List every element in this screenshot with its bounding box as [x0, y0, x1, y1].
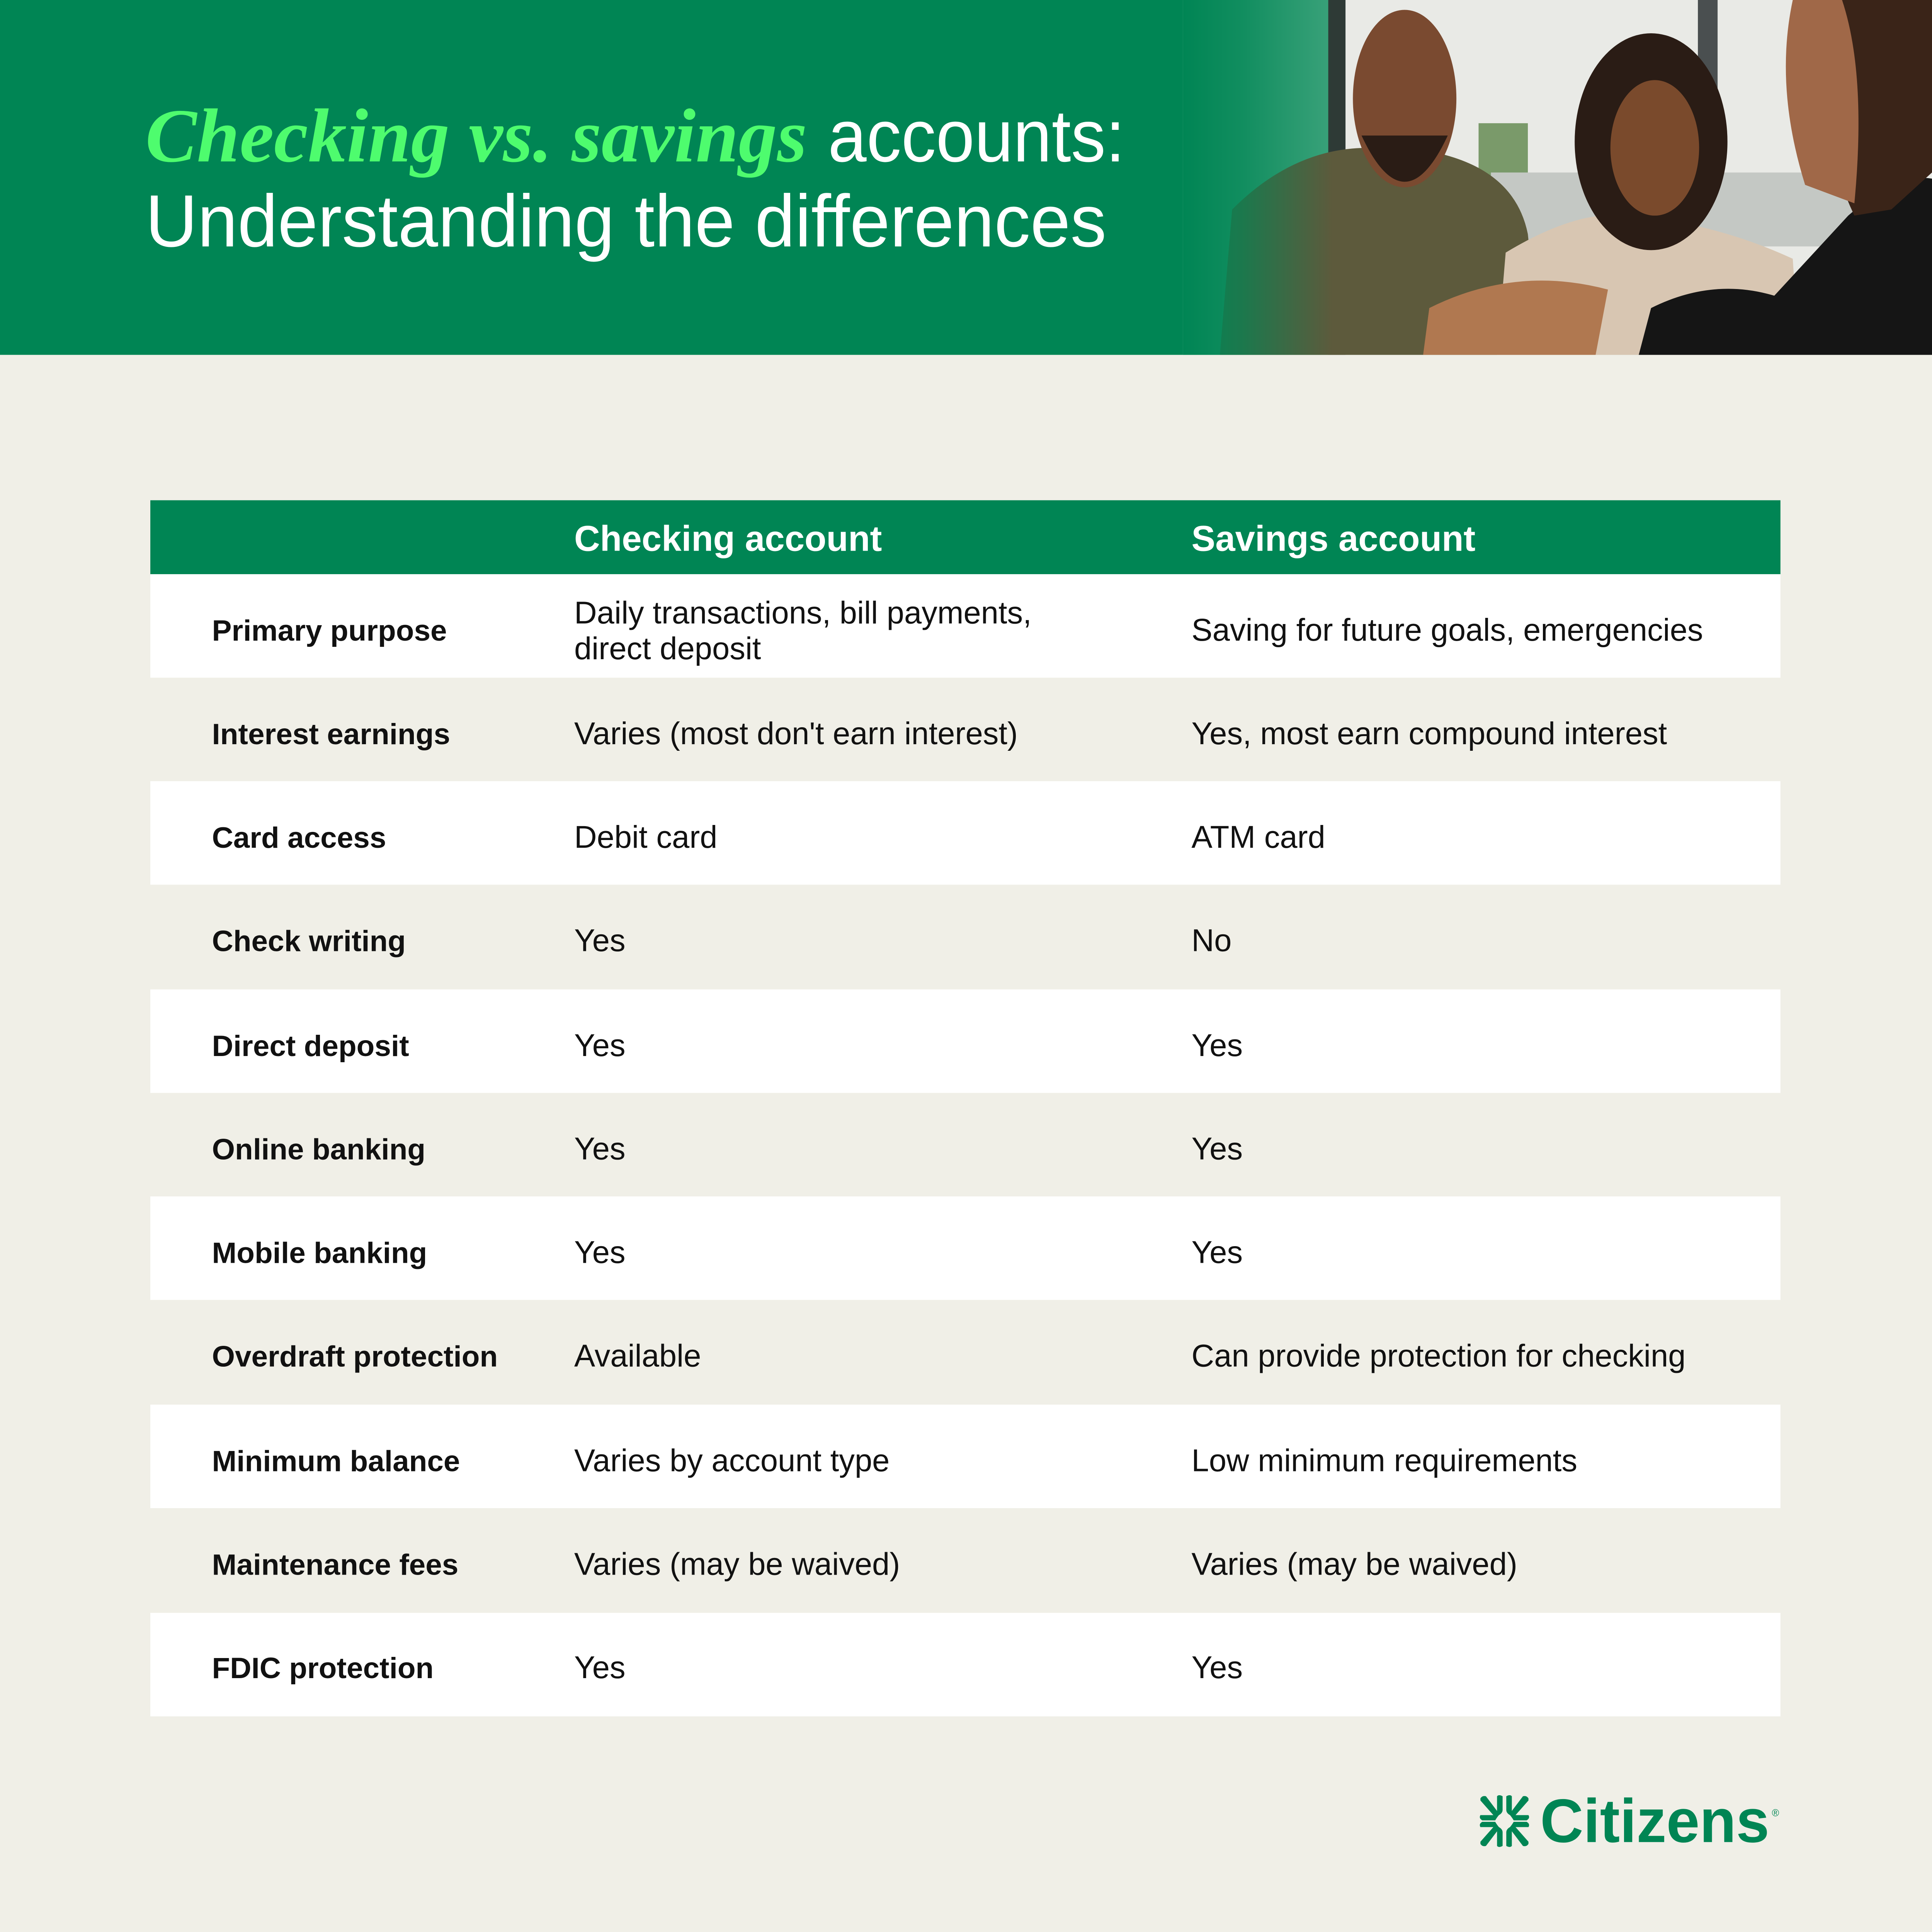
row: card access: Card access [212, 821, 386, 854]
row: FDIC protection: FDIC protection [212, 1652, 434, 1685]
row: direct deposit: Yes [1192, 1028, 1243, 1063]
row: maintenance fees: Varies (may be waived) [1192, 1546, 1517, 1582]
row: online banking: Yes [1192, 1131, 1243, 1167]
title line 1 [145, 94, 1125, 178]
row: interest earnings [212, 716, 1667, 751]
row: minimum balance: Minimum balance [212, 1445, 460, 1478]
table header row: Checking account [574, 518, 882, 558]
table header row [150, 500, 1781, 574]
row: primary purpose: Daily transactions, bill payments, [574, 595, 1032, 631]
row: minimum balance: Varies by account type [574, 1443, 889, 1478]
photo: handshake meeting [1183, 0, 1932, 355]
row: overdraft protection: Overdraft protection [212, 1340, 498, 1373]
logo: Citizens: ® [1772, 1808, 1779, 1818]
icon: Citizens mark [1480, 1795, 1529, 1847]
row: FDIC protection: Yes [1192, 1650, 1243, 1685]
row: interest earnings: Yes, most earn compound interest [1192, 716, 1667, 751]
row: mobile banking: Yes [574, 1235, 626, 1270]
row: online banking [212, 1131, 1243, 1167]
row: mobile banking [150, 1196, 1781, 1300]
row: mobile banking: Mobile banking [212, 1236, 427, 1269]
row: card access [150, 781, 1781, 885]
row: interest earnings: Interest earnings [212, 718, 450, 751]
row: check writing: Check writing [212, 925, 406, 958]
row: check writing: Yes [574, 923, 626, 958]
title line 1: Checking vs. savings [145, 94, 807, 178]
row: FDIC protection [150, 1613, 1781, 1716]
title line 1: accounts: [828, 95, 1125, 177]
logo: Citizens [1480, 1786, 1779, 1855]
row: minimum balance: Low minimum requirements [1192, 1443, 1577, 1478]
row: check writing: No [1192, 923, 1231, 958]
row: overdraft protection: Available [574, 1338, 701, 1373]
row: check writing [212, 923, 1231, 958]
row: direct deposit [150, 990, 1781, 1093]
wordmark: Citizens [1540, 1786, 1769, 1855]
row: online banking: Yes [574, 1131, 626, 1167]
row: online banking: Online banking [212, 1133, 425, 1166]
row: primary purpose: direct deposit [574, 631, 761, 666]
row: mobile banking: Yes [1192, 1235, 1243, 1270]
table header row: Savings account [1192, 518, 1475, 558]
row: overdraft protection: Can provide protection for checking [1192, 1338, 1685, 1373]
row: minimum balance [150, 1405, 1781, 1508]
row: FDIC protection: Yes [574, 1650, 626, 1685]
row: primary purpose: Primary purpose [212, 614, 447, 647]
row: maintenance fees: Varies (may be waived) [574, 1546, 900, 1582]
row: card access: Debit card [574, 820, 718, 855]
row: maintenance fees: Maintenance fees [212, 1548, 458, 1581]
row: primary purpose [150, 574, 1781, 678]
comparison table [150, 500, 1781, 1716]
header band [0, 0, 1932, 355]
row: interest earnings: Varies (most don't earn interest) [574, 716, 1018, 751]
row: direct deposit: Direct deposit [212, 1030, 409, 1063]
row: primary purpose: Saving for future goals, emergencies [1192, 612, 1703, 648]
row: overdraft protection [212, 1338, 1685, 1373]
title line 2: Understanding the differences [145, 180, 1107, 262]
row: card access: ATM card [1192, 820, 1325, 855]
row: maintenance fees [212, 1546, 1517, 1582]
row: direct deposit: Yes [574, 1028, 626, 1063]
